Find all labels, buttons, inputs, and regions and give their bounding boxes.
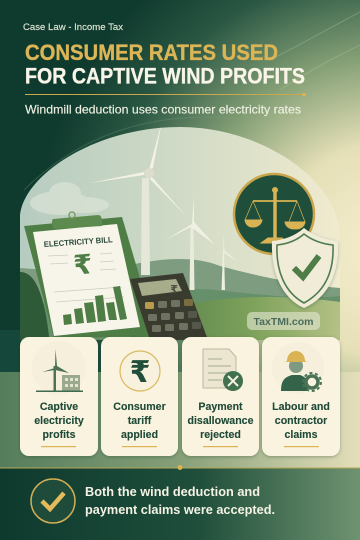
clouds <box>30 182 109 215</box>
icon: worker and gear <box>272 342 324 394</box>
calculator <box>130 273 208 340</box>
icon: check circle <box>31 479 75 523</box>
card: consumer tariff applied <box>101 337 178 456</box>
calculator: ₹ <box>170 283 178 296</box>
calculator keys <box>145 299 201 332</box>
conclusion text: Both the wind deduction and <box>85 485 260 499</box>
watermark pill <box>247 312 320 330</box>
card: consumer tariff applied: tariff <box>128 415 152 427</box>
title: FOR CAPTIVE WIND PROFITS <box>25 64 305 88</box>
bill lines <box>48 253 124 302</box>
card: consumer tariff applied: applied <box>121 429 158 441</box>
subtitle: Windmill deduction uses consumer electricity rates <box>25 102 301 116</box>
conclusion text <box>85 485 275 517</box>
card: labour and contractor claims: Labour and <box>272 401 330 413</box>
card: payment disallowance rejected: disallowance <box>188 415 254 427</box>
card: consumer tariff applied: Consumer <box>113 401 166 413</box>
badge: scales of justice <box>234 174 314 254</box>
icon: turbine and building <box>36 349 83 392</box>
bar chart <box>63 286 127 325</box>
shield with check <box>272 228 338 308</box>
hills <box>20 259 340 304</box>
card: payment disallowance rejected <box>182 337 259 456</box>
conclusion text: payment claims were accepted. <box>85 503 275 517</box>
card: captive electricity profits: profits <box>43 429 76 441</box>
card: payment disallowance rejected: rejected <box>200 429 241 441</box>
hero illustration <box>20 120 340 345</box>
icon: rupee coin: ₹ <box>130 355 150 390</box>
card: captive electricity profits <box>20 337 98 456</box>
card: labour and contractor claims <box>262 337 340 456</box>
icon: document with cross <box>203 349 243 391</box>
clipboard: electricity bill <box>24 212 157 338</box>
card: captive electricity profits: electricity <box>34 415 84 427</box>
meadow <box>130 297 340 340</box>
conclusion banner <box>0 465 360 540</box>
wind turbines <box>90 121 238 290</box>
card: labour and contractor claims: claims <box>285 429 318 441</box>
card: labour and contractor claims: contractor <box>275 415 327 427</box>
title: CONSUMER RATES USED <box>25 40 278 65</box>
card: payment disallowance rejected: Payment <box>198 401 243 413</box>
watermark pill: TaxTMI.com <box>254 317 314 328</box>
title <box>25 40 305 88</box>
eyebrow: case law: Case Law - Income Tax <box>23 22 123 33</box>
title rule <box>25 93 306 96</box>
card: captive electricity profits: Captive <box>40 401 78 413</box>
rupee symbol: ₹ <box>72 249 94 282</box>
bill heading: ELECTRICITY BILL <box>44 235 113 249</box>
